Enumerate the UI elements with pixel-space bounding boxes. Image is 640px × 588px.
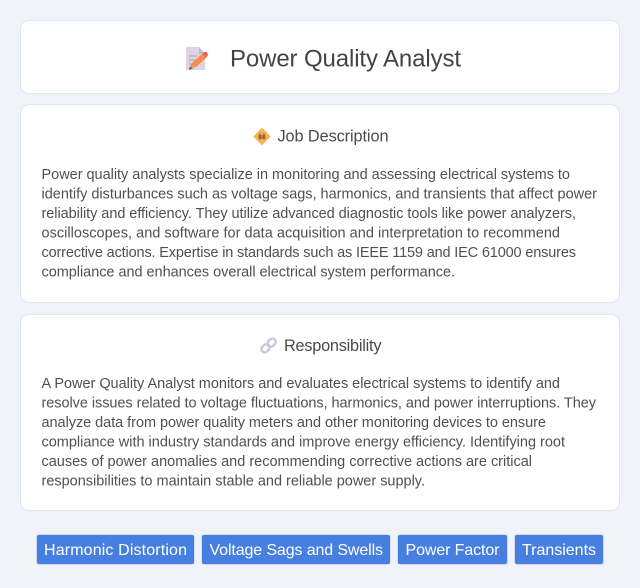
icon: chain link xyxy=(260,337,277,354)
title: Power Quality Analyst xyxy=(230,46,461,72)
job description text: compliance and enhances overall electrical system performance. xyxy=(42,264,455,280)
icon: orange diamond sign xyxy=(254,128,270,144)
tag: voltage sags and swells: Voltage Sags and Swells xyxy=(210,542,383,559)
heading: job description: Job Description xyxy=(278,128,388,146)
job description text: corrective actions. Expertise in standards such as IEEE 1159 and IEC 61000 ensures xyxy=(42,245,576,261)
job description text: Power quality analysts specialize in monitoring and assessing electrical systems to xyxy=(42,167,570,183)
job description text: identify disturbances such as voltage sags, harmonics, and transients that affect power xyxy=(42,186,597,202)
heading: responsibility: Responsibility xyxy=(284,337,382,355)
panel: title card xyxy=(20,20,620,94)
tag: harmonic distortion xyxy=(36,534,194,564)
tag: power factor: Power Factor xyxy=(406,542,500,559)
icon: document with pencil xyxy=(186,47,208,70)
tag: power factor xyxy=(398,534,508,564)
responsibility text: resolve issues related to voltage fluctuations, harmonics, and power interruptions. They xyxy=(42,395,597,411)
job description text xyxy=(42,167,597,280)
responsibility text: analyze data from power quality meters and other monitoring devices to ensure xyxy=(42,415,546,431)
tag: harmonic distortion: Harmonic Distortion xyxy=(44,542,187,559)
job description text: oscilloscopes, and software for data acquisition and interpretation to recommend xyxy=(42,225,560,241)
tag: transients: Transients xyxy=(522,542,596,559)
panel: job description xyxy=(20,104,620,303)
job description text: reliability and efficiency. They utilize advanced diagnostic tools like power analyzers, xyxy=(42,206,576,222)
responsibility text: compliance with industry standards and improve energy efficiency. Identifying root xyxy=(42,434,565,450)
tag: transients xyxy=(514,534,604,564)
responsibility text: causes of power anomalies and recommending corrective actions are critical xyxy=(42,454,532,470)
responsibility text xyxy=(42,376,597,489)
tag: voltage sags and swells xyxy=(202,534,390,564)
responsibility text: responsibilities to maintain stable and reliable power supply. xyxy=(42,473,425,489)
panel: responsibility xyxy=(20,314,620,511)
responsibility text: A Power Quality Analyst monitors and evaluates electrical systems to identify and xyxy=(42,376,560,392)
